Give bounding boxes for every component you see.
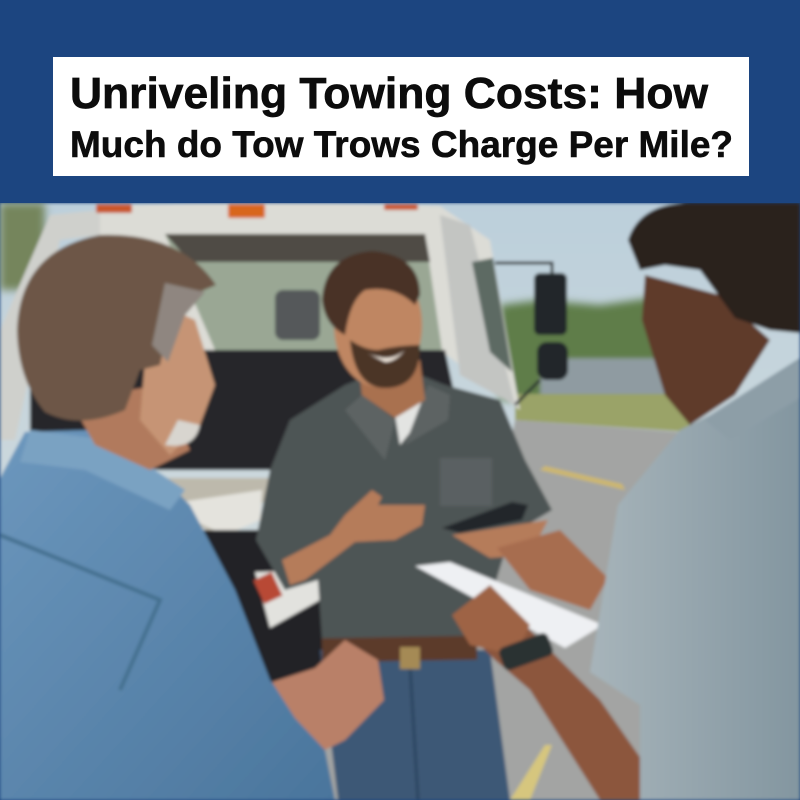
hands	[272, 640, 384, 750]
jeans	[320, 650, 510, 800]
center man	[256, 251, 552, 800]
face	[140, 300, 215, 455]
right man	[415, 203, 800, 800]
windshield	[165, 234, 442, 350]
title box	[53, 57, 749, 176]
belt	[322, 636, 477, 662]
truck bed	[30, 350, 460, 470]
neck	[70, 385, 190, 470]
phone	[442, 502, 528, 533]
arm and hands	[460, 585, 670, 800]
phone hand	[452, 520, 548, 558]
neck and head	[358, 360, 425, 418]
forearm and hand	[282, 490, 425, 585]
left man	[0, 235, 384, 800]
side mirrors	[534, 273, 567, 335]
shirt	[256, 365, 552, 640]
background: sky, trees and road	[0, 203, 800, 800]
roof lights	[228, 204, 265, 218]
truck cab	[100, 203, 520, 410]
gray shirt	[590, 358, 800, 800]
hair	[628, 203, 800, 333]
hair	[17, 235, 216, 421]
paper	[415, 562, 603, 648]
title line 2: Much do Tow Trows Charge Per Mile?	[70, 124, 733, 165]
photo: roadside tow truck conversation	[0, 203, 800, 800]
tow truck	[0, 203, 568, 690]
neck and face	[642, 275, 770, 425]
denim shirt	[0, 430, 335, 800]
title line 1: Unriveling Towing Costs: How	[70, 69, 709, 118]
header band	[0, 0, 800, 203]
watch	[497, 631, 554, 672]
